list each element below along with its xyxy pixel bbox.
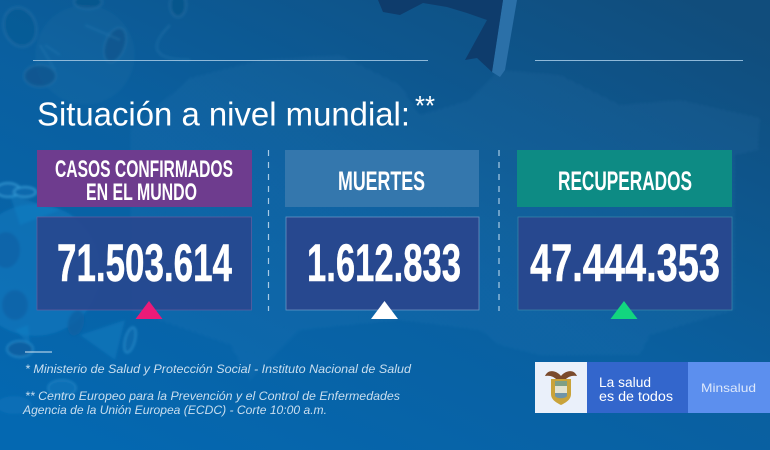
heading: casos confirmados: EN EL MUNDO <box>86 179 197 206</box>
heading: casos confirmados: CASOS CONFIRMADOS <box>55 156 233 183</box>
footnotes <box>22 352 411 417</box>
panel: muertes <box>285 150 479 319</box>
dashed column dividers <box>268 150 499 311</box>
value: muertes: 1.612.833 <box>307 234 461 293</box>
virus: top left <box>0 0 190 105</box>
title: ** <box>415 90 435 121</box>
value: recuperados <box>518 217 732 310</box>
panel: recuperados <box>517 150 732 319</box>
footnotes: * Ministerio de Salud y Protección Social - Instituto Nacional de Salud <box>25 362 411 376</box>
heading: muertes: MUERTES <box>338 166 425 196</box>
value: muertes <box>286 217 479 310</box>
icon: pink triangle <box>136 301 162 319</box>
heading: casos confirmados <box>37 150 252 207</box>
dotted world map <box>130 55 760 380</box>
value: casos confirmados: 71.503.614 <box>57 234 232 293</box>
icon: coat of arms <box>545 371 577 405</box>
heading: recuperados: RECUPERADOS <box>558 166 692 196</box>
logo: La salud es de todos, Minsalud: Minsalud <box>701 381 756 395</box>
title: Situación a nivel mundial: <box>37 96 410 132</box>
value: casos confirmados <box>37 217 252 310</box>
footnotes: Agencia de la Unión Europea (ECDC) - Corte 10:00 a.m. <box>22 403 327 417</box>
heading: muertes <box>285 150 479 207</box>
footnotes: ** Centro Europeo para la Prevención y el Control de Enfermedades <box>25 389 400 403</box>
panel: casos confirmados <box>37 150 252 319</box>
top rules <box>33 60 743 62</box>
logo: La salud es de todos, Minsalud: es de todos <box>599 389 673 404</box>
logo: La salud es de todos, Minsalud: La salud <box>599 375 651 390</box>
map of Colombia fragment <box>378 0 517 77</box>
icon: white triangle <box>371 301 398 319</box>
logo: La salud es de todos, Minsalud <box>535 362 770 413</box>
virus illustrations <box>0 0 190 414</box>
icon: green triangle <box>610 301 638 319</box>
virus: lower left <box>0 183 138 414</box>
heading: recuperados <box>517 150 732 207</box>
